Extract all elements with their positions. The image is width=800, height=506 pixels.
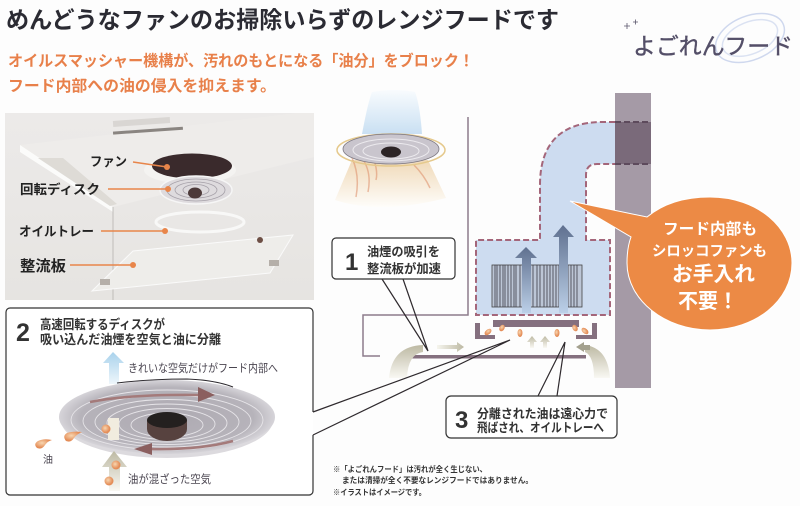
rotating disc [160, 176, 232, 204]
panel: product photo [5, 113, 314, 300]
subheading: フード内部への油の侵入を抑えます。 [8, 77, 276, 95]
sirocco fan [492, 265, 582, 307]
subheading [8, 51, 474, 95]
orange speech bubble: シロッコファンも [652, 243, 767, 260]
footnote: または清掃が全く不要なレンジフードではありません。 [342, 475, 533, 485]
small swirl illustration [335, 90, 446, 207]
title: めんどうなファンのお掃除いらずのレンジフードです [6, 7, 559, 33]
hood underside [20, 113, 314, 207]
arrows: air intake [389, 336, 610, 378]
callout leader lines [313, 279, 565, 435]
straightening plate [92, 235, 293, 291]
callout 1: 油煙の吸引を [367, 244, 440, 259]
footnote: ※イラストはイメージです。 [333, 488, 426, 497]
orange speech bubble: フード内部も [663, 220, 757, 238]
label: mixed air: 油が混ざった空気 [128, 472, 211, 486]
footnote [333, 464, 533, 497]
logo: よごれんフード: よごれんフード [633, 33, 793, 59]
label: clean air: きれいな空気だけがフード内部へ [128, 361, 278, 375]
photo labels: 回転ディスク [20, 182, 100, 197]
callout 3: 分離された油は遠心力で [477, 406, 608, 421]
hood outline [363, 117, 468, 356]
callout 1: 1 [345, 249, 358, 276]
callout 3: 3 [455, 407, 468, 434]
label: oil: 油 [43, 453, 53, 466]
disc plate and oil tray [411, 320, 597, 358]
orange speech bubble: 不要！ [678, 290, 738, 313]
step 2 text: 吸い込んだ油煙を空気と油に分離 [40, 332, 221, 347]
vertical wall line [112, 207, 114, 300]
step 2 text: 高速回転するディスクが [40, 317, 165, 332]
oil tray [156, 212, 244, 232]
fan opening [144, 156, 236, 184]
photo labels [19, 154, 127, 275]
disc illustration [59, 379, 275, 458]
callout 3: 飛ばされ、オイルトレーへ [477, 420, 604, 435]
leader lines [70, 162, 171, 268]
callout 3 [446, 396, 617, 438]
panel: step 2 [6, 308, 313, 495]
subheading: オイルスマッシャー機構が、汚れのもとになる「油分」をブロック！ [8, 51, 474, 70]
footnote: ※「よごれんフード」は汚れが全く生じない、 [333, 464, 487, 474]
arrow: oily air up [102, 451, 127, 491]
orange speech bubble [570, 197, 792, 330]
photo labels: ファン [90, 154, 127, 169]
duct [476, 122, 651, 315]
wall [615, 93, 651, 388]
logo: よごれんフード [624, 4, 793, 72]
oil droplets in hood [483, 324, 590, 337]
callout 1: 整流板が加速 [367, 261, 441, 276]
photo labels: オイルトレー [19, 224, 94, 239]
step 2 text [40, 317, 221, 347]
step 2 number: 2 [16, 319, 30, 347]
arrows: airflow in duct [515, 225, 574, 313]
oil droplets [35, 424, 120, 486]
orange speech bubble: お手入れ [672, 263, 755, 286]
callout 1 [332, 238, 455, 279]
arrow: clean air up [103, 352, 124, 384]
photo labels: 整流板 [20, 257, 66, 275]
